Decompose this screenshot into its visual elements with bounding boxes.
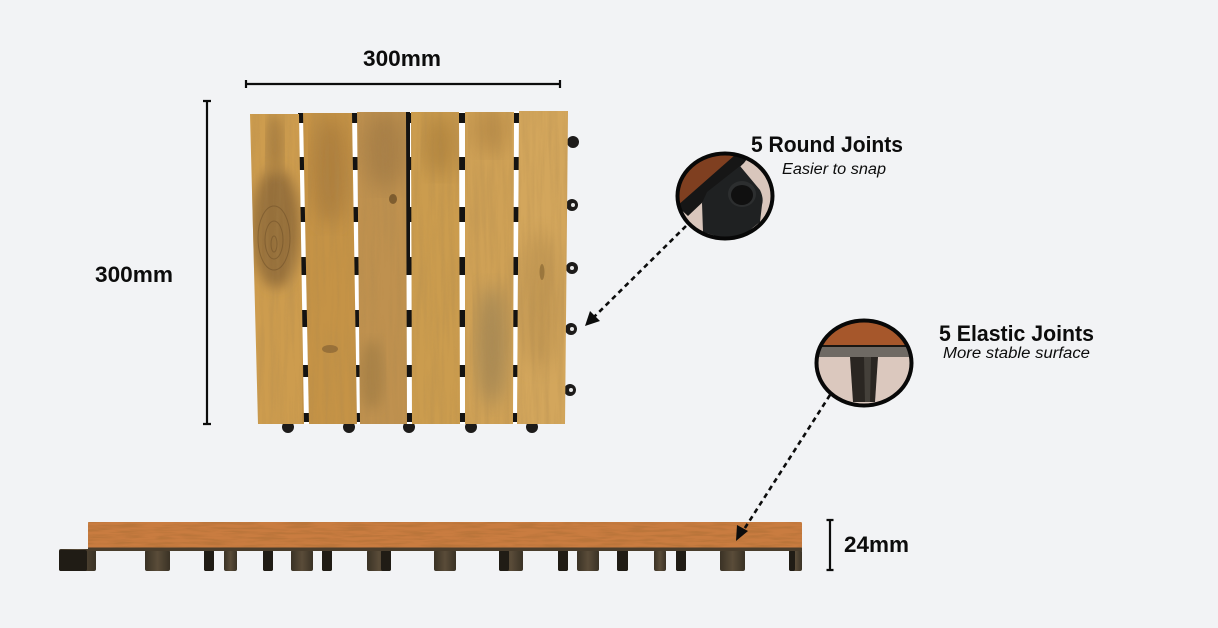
top view deck tile bbox=[245, 105, 579, 433]
icon: round joint magnifier bbox=[676, 152, 774, 240]
callout: elastic joints heading bbox=[939, 321, 1094, 362]
callout: elastic joints heading: 5 Elastic Joints bbox=[939, 321, 1094, 346]
slat gaps bbox=[299, 111, 519, 424]
joint holes bbox=[569, 203, 575, 392]
callout: round joints heading: 5 Round Joints bbox=[751, 132, 903, 157]
wood knots bbox=[258, 206, 290, 270]
side view dark leg shading bbox=[59, 550, 795, 571]
dimension: thickness 24mm: 24mm bbox=[844, 532, 909, 557]
side view wood plank bbox=[88, 522, 802, 548]
dimension: left height 300mm: 300mm bbox=[95, 262, 173, 287]
callout: elastic joints heading: More stable surface bbox=[943, 345, 1090, 362]
side view deck tile bbox=[59, 522, 802, 571]
dimension: top width 300mm bbox=[246, 46, 560, 88]
dimension: thickness 24mm bbox=[826, 520, 909, 570]
dimension: left height 300mm bbox=[95, 101, 211, 424]
bottom joints bbox=[282, 421, 538, 433]
side view legs bbox=[59, 549, 802, 571]
arrow: elastic joint pointer bbox=[736, 395, 830, 541]
arrow: round joint pointer bbox=[585, 226, 686, 326]
dimension: top width 300mm: 300mm bbox=[363, 46, 441, 71]
icon: elastic joint magnifier bbox=[814, 318, 914, 408]
black cross bars under slats bbox=[298, 112, 522, 422]
round joints on the right edge bbox=[564, 136, 579, 396]
wood slats bbox=[245, 105, 575, 430]
callout: round joints heading bbox=[751, 132, 903, 178]
callout: round joints heading: Easier to snap bbox=[782, 161, 886, 178]
